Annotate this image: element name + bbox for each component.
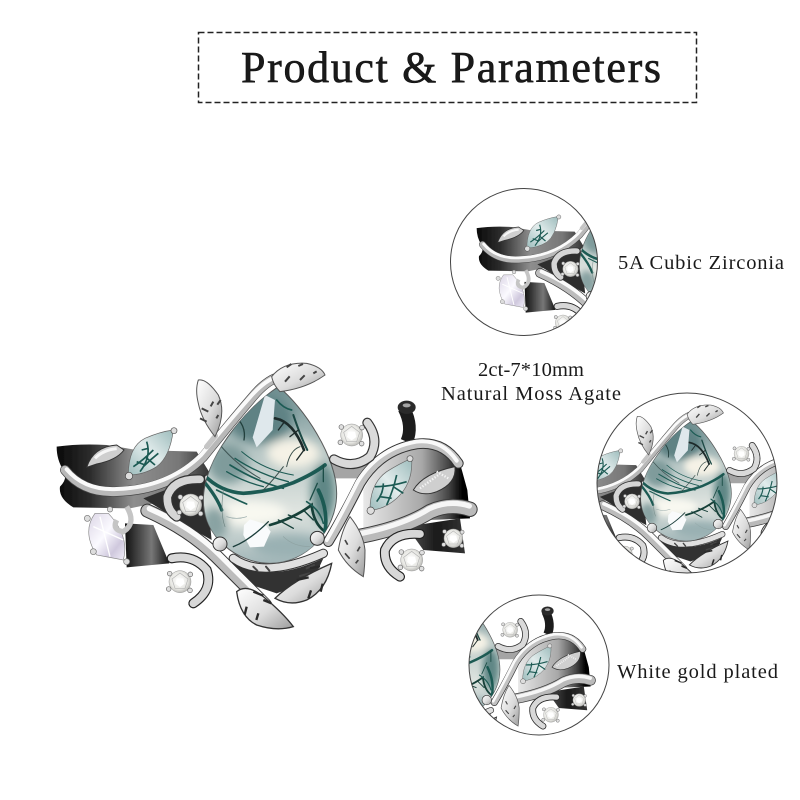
curl scroll [115,507,131,532]
label: moss agate [441,359,621,405]
lower left black band [125,523,169,567]
right band [363,445,470,530]
label: moss agate: Natural Moss Agate [441,383,621,405]
left black band [57,444,210,508]
small round diamonds [166,424,464,593]
band behind stone [330,462,372,478]
right small leaf [413,467,455,494]
top right knob [398,401,416,442]
crescents [167,423,420,603]
left vine [65,378,275,492]
stone prongs [213,531,324,551]
label: cubic zirconia: 5A Cubic Zirconia [618,252,784,274]
lower right dark band [407,518,465,553]
top leaf [272,363,325,392]
centre right leaf [338,517,365,577]
moss strands [204,400,326,547]
lower crossing vine [147,509,267,605]
crystal facet lower [243,519,271,547]
detail circle: moss agate [596,392,778,574]
detail circle: cubic zirconia [450,188,598,336]
right marquise moss agate [367,456,413,514]
bottom leaf [237,588,293,629]
moss agate pear stone [202,387,337,563]
label: plating: White gold plated [617,661,778,683]
left marquise moss agate [125,428,177,480]
right vine [327,441,458,542]
left leaf [197,380,222,437]
dashed border [198,32,696,102]
crystal facet top [253,395,275,447]
dark gap beside stone [143,475,212,540]
dark gap under stone [233,558,323,593]
label: moss agate: 2ct-7*10mm [478,359,584,381]
detail circle: plating [468,594,610,736]
title: Product & Parameters [241,43,661,92]
main ring illustration [57,363,470,629]
cubic zirconia stone [84,507,130,565]
under stone vine [233,553,323,576]
title box [198,32,696,102]
bottom second leaf [275,563,332,603]
left small leaf [87,445,124,467]
lower right vine [358,503,470,537]
